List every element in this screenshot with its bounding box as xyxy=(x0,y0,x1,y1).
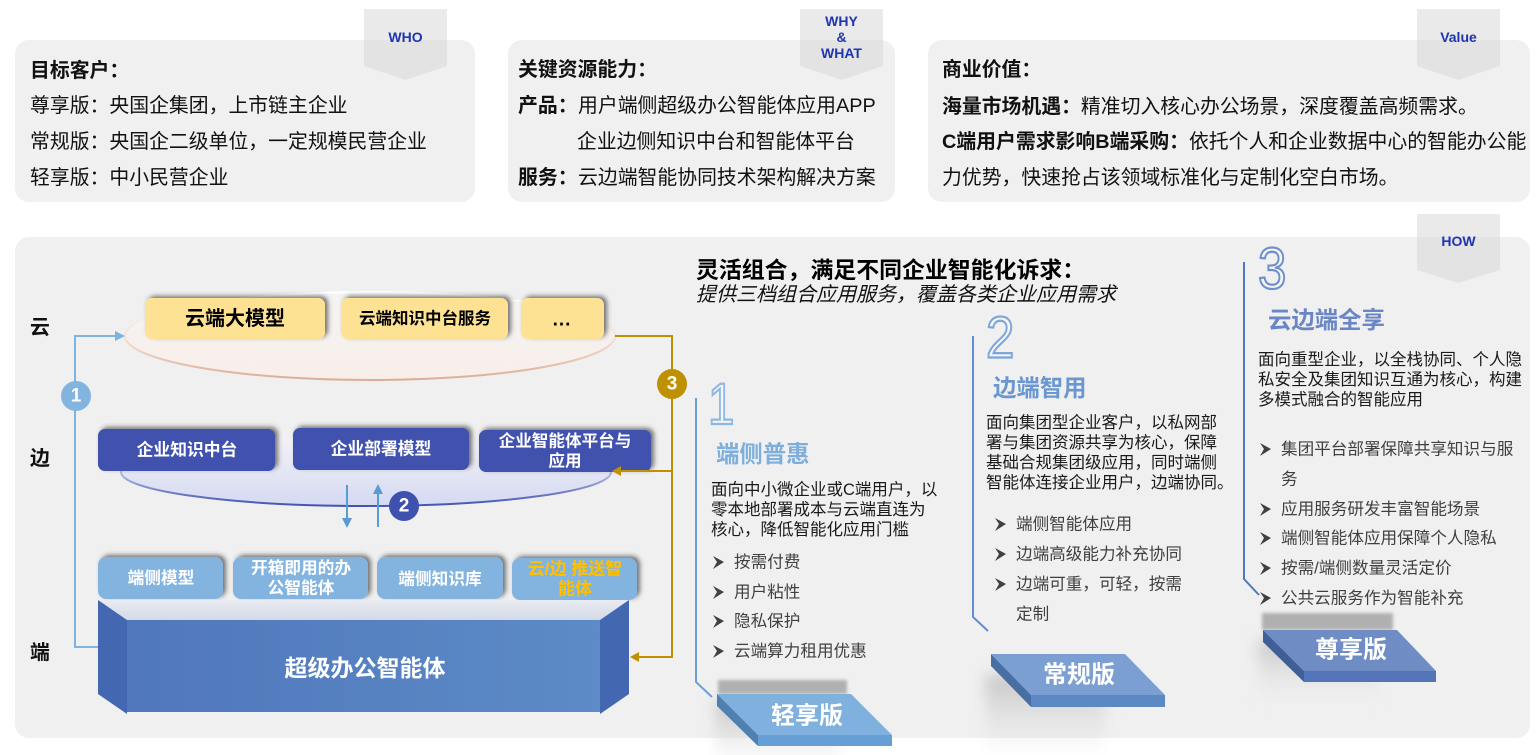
edge modules: 企业智能体平台与 xyxy=(499,430,631,450)
tag: HOW: HOW xyxy=(1441,233,1476,249)
description: 面向中小微企业或C端用户，以 xyxy=(711,480,937,499)
heading: flexible combination: 灵活组合，满足不同企业智能化诉求： xyxy=(696,257,1085,283)
description xyxy=(711,480,937,539)
column 1: light edition xyxy=(696,373,937,755)
edge modules xyxy=(98,428,651,472)
column 2: standard edition xyxy=(973,306,1234,755)
description: 面向集团型企业客户，以私网部 xyxy=(986,413,1217,432)
arrow 1: device to cloud: 1 xyxy=(71,386,82,406)
text: value description: 力优势，快速抢占该领域标准化与定制化空白市场。 xyxy=(942,167,1398,189)
bullets: 边端高级能力补充协同 xyxy=(1016,544,1182,564)
arrow 3: cloud to edge and device xyxy=(612,336,687,662)
bullets: 公共云服务作为智能补充 xyxy=(1281,588,1464,608)
device modules: 端侧模型 xyxy=(128,568,194,588)
platform: premium edition: 尊享版 xyxy=(1315,636,1387,664)
cloud modules: 云端大模型 xyxy=(185,307,285,330)
platform: standard edition xyxy=(985,654,1165,755)
text: products and services: 企业边侧知识中台和智能体平台 xyxy=(577,131,855,153)
text: customer tiers: 尊享版：央国企集团，上市链主企业 xyxy=(30,95,348,117)
bullets: 应用服务研发丰富智能场景 xyxy=(1281,500,1480,518)
tag: WHO: WHO xyxy=(388,29,423,45)
tag: Value xyxy=(1417,9,1500,80)
bullets: 边端可重，可轻，按需 xyxy=(1016,574,1182,594)
bullets: 按需付费 xyxy=(734,552,800,572)
bullets: 定制 xyxy=(1016,604,1049,624)
text: products and services: 产品： xyxy=(518,95,578,117)
platform: light edition xyxy=(715,680,892,755)
text: products and services xyxy=(518,95,876,189)
device modules: 云/边 推送智 xyxy=(528,558,622,578)
bullets: 端侧智能体应用保障个人隐私 xyxy=(1281,528,1497,548)
heading: target customers: 目标客户： xyxy=(30,59,129,82)
bullets: 端侧智能体应用 xyxy=(1016,514,1132,534)
layer labels: 端 xyxy=(30,642,50,664)
device modules: 开箱即用的办 xyxy=(251,558,351,578)
layer labels xyxy=(30,317,50,664)
layer labels: 边 xyxy=(30,448,50,470)
description: 基础合规集团级应用，同时端侧 xyxy=(986,453,1217,472)
tag: Value: Value xyxy=(1440,29,1477,45)
text: value description: C端用户需求影响B端采购：依托个人和企业数据中心的智能办公能 xyxy=(942,130,1526,153)
heading: business value: 商业价值： xyxy=(942,59,1041,81)
arrow 3: cloud to edge and device: 3 xyxy=(667,374,677,394)
text: value description xyxy=(942,95,1526,189)
text: customer tiers: 常规版：央国企二级单位，一定规模民营企业 xyxy=(30,131,427,153)
arrow 2: edge and device exchange: 2 xyxy=(399,496,409,516)
text: customer tiers xyxy=(30,95,427,189)
device modules: 端侧知识库 xyxy=(398,570,482,588)
text: value description: 海量市场机遇：精准切入核心办公场景，深度覆盖高频需求。 xyxy=(942,95,1478,118)
cloud modules xyxy=(145,298,604,339)
device modules: 公智能体 xyxy=(268,578,335,598)
bullets xyxy=(1260,440,1514,608)
edge ellipse xyxy=(121,438,611,506)
tag: WHY & WHAT: & xyxy=(836,29,847,45)
bullets xyxy=(713,552,867,660)
description: 多模式融合的智能应用 xyxy=(1258,390,1423,409)
platform: premium edition xyxy=(1258,613,1436,705)
description: 私安全及集团知识互通为核心，构建 xyxy=(1258,370,1522,389)
arrow 2: edge and device exchange xyxy=(342,484,419,528)
edge modules: 企业知识中台 xyxy=(137,440,237,460)
description: 智能体连接企业用户，边端协同。 xyxy=(986,473,1234,492)
description: 零本地部署成本与云端直连为 xyxy=(711,500,926,519)
tag: WHY & WHAT xyxy=(800,9,883,80)
text: products and services: 云边端智能协同技术架构解决方案 xyxy=(578,167,876,189)
panel: business value xyxy=(928,9,1530,202)
numeral 1: 1 xyxy=(708,373,734,437)
description: 核心，降低智能化应用门槛 xyxy=(711,520,909,539)
bullets: 集团平台部署保障共享知识与服 xyxy=(1281,440,1514,458)
block: super office agent xyxy=(98,600,629,714)
panel: why and what xyxy=(508,9,895,202)
layer labels: 云 xyxy=(30,317,50,339)
tag: WHY & WHAT: WHAT xyxy=(821,45,862,61)
cloud ellipse xyxy=(125,292,615,380)
bullets: 云端算力租用优惠 xyxy=(734,642,867,660)
description: 面向重型企业，以全栈协同、个人隐 xyxy=(1258,350,1522,369)
device modules: 能体 xyxy=(558,580,592,598)
numeral 2: 2 xyxy=(986,306,1014,370)
device modules xyxy=(98,557,637,600)
cloud modules: ... xyxy=(553,310,571,330)
panel: how xyxy=(15,214,1530,755)
bullets: 按需/端侧数量灵活定价 xyxy=(1281,558,1452,578)
description xyxy=(1258,350,1522,409)
description xyxy=(986,413,1234,492)
tag: HOW xyxy=(1417,214,1500,283)
text: products and services: 服务： xyxy=(518,167,578,189)
subheading: 提供三档组合应用服务，覆盖各类企业应用需求 xyxy=(696,284,1119,306)
edge modules: 应用 xyxy=(548,450,582,470)
heading: key resources: 关键资源能力： xyxy=(518,59,657,81)
numeral 3: 3 xyxy=(1258,237,1286,301)
arrow 1: device to cloud xyxy=(61,331,125,647)
cloud modules: 云端知识中台服务 xyxy=(359,308,492,328)
description: 署与集团资源共享为核心，保障 xyxy=(986,433,1217,452)
text: products and services: 用户端侧超级办公智能体应用APP xyxy=(578,95,876,117)
title: 端侧普惠 xyxy=(716,441,810,467)
bullets: 隐私保护 xyxy=(734,612,800,630)
text: customer tiers: 轻享版：中小民营企业 xyxy=(30,167,228,189)
tag: WHY & WHAT: WHY xyxy=(825,13,858,29)
title: 云边端全享 xyxy=(1268,307,1385,333)
bullets: 用户粘性 xyxy=(734,582,800,602)
block: super office agent: 超级办公智能体 xyxy=(284,655,446,681)
edge modules: 企业部署模型 xyxy=(331,438,431,458)
column 3: premium edition xyxy=(1244,237,1522,705)
panel: who xyxy=(15,9,475,202)
platform: standard edition: 常规版 xyxy=(1043,662,1115,688)
platform: light edition: 轻享版 xyxy=(771,702,843,730)
bullets xyxy=(995,514,1182,624)
title: 边端智用 xyxy=(993,375,1087,401)
tag: WHO xyxy=(364,9,447,80)
bullets: 务 xyxy=(1281,470,1298,488)
